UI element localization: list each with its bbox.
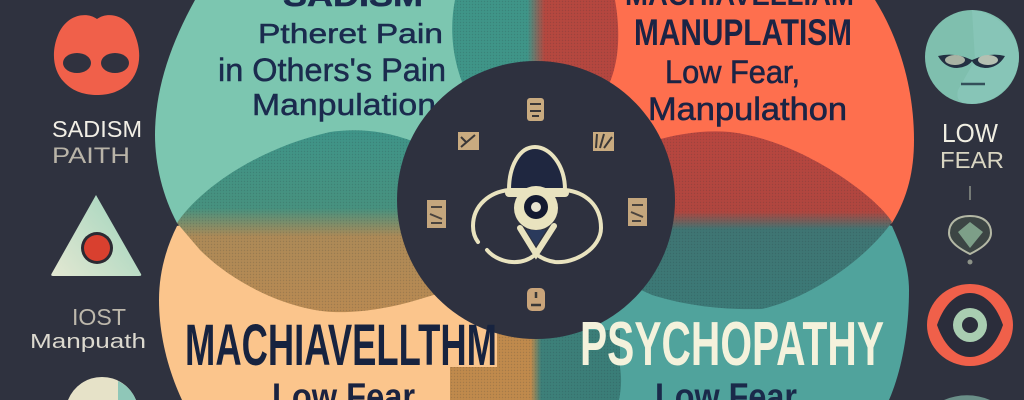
label: SADISM: SADISM [52,116,142,142]
icon: partial teal circle [944,395,990,400]
bottom-left heading: MACHIAVELLTHM: MACHIAVELLTHM [185,313,497,378]
label: LOW: LOW [942,118,998,148]
overlap: sadism and machiavellianism top lens [452,0,618,100]
icon: glyph upper right [593,132,614,151]
label: FEAR: FEAR [940,147,1004,173]
panel: top-left sadism lobe [155,0,540,340]
panel: bottom-left peach lobe [159,200,540,400]
icon: cream circle [68,377,136,400]
icon: glyph top [527,98,544,121]
icon: glyph bottom [527,288,545,311]
icon: triple ring symbol [473,147,601,262]
overlap: right lens [620,131,892,309]
icon: leaf diamond [949,186,991,264]
icon: center eye [514,186,558,230]
center dark circle [397,61,675,339]
machiavellianism lobe body text [625,0,854,127]
overlap: bottom lens [450,330,621,400]
machiavellianism lobe body text: Manpulathon [648,91,847,127]
icon: glyph left [427,200,446,228]
icon: glyph upper left [458,132,479,150]
sadism lobe body text: in Others's Pain [218,52,446,88]
label: IOST: IOST [72,304,126,330]
sadism lobe body text [218,0,446,122]
icon: red heart mask [54,15,139,95]
icon: glyph right [628,198,647,226]
sadism lobe body text: Manpulation [252,87,436,122]
icon: masked face [925,10,1019,104]
icon: orange eye [927,284,1013,366]
panel: top-right machiavellianism lobe [530,0,914,340]
icon: triangle eye [51,195,141,276]
panel: bottom-right teal lobe [530,200,909,400]
machiavellianism lobe body text: MANUPLATISM [634,12,852,53]
machiavellianism lobe body text: Low Fear, [665,54,800,90]
overlap: left lens [177,130,450,312]
sadism lobe body text: Ptheret Pain [258,18,443,49]
label: PAITH: PAITH [52,143,130,168]
label: Manpuath: Manpuath [30,331,146,353]
